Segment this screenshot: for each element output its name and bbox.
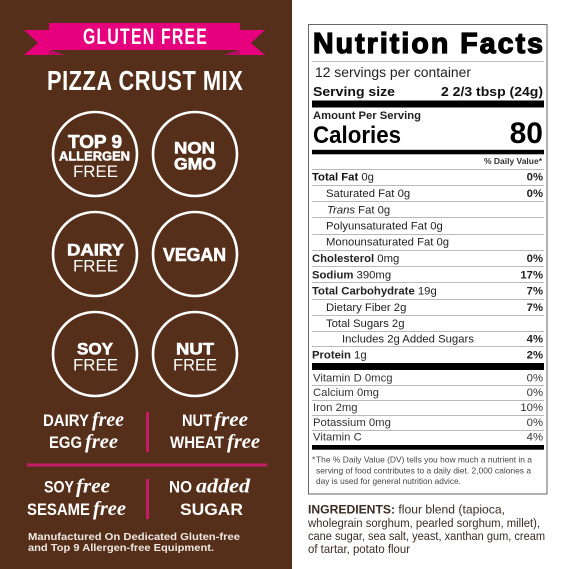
ingredients: INGREDIENTS: flour blend (tapioca, (308, 503, 505, 517)
nutrient rows: 0% (527, 188, 543, 200)
vitamins and minerals: Calcium 0mg (313, 387, 379, 399)
servings: 2 2/3 tbsp (24g) (441, 84, 543, 99)
claim: egg free: free (85, 431, 118, 453)
claim: sesame free: free (93, 498, 126, 520)
vitamins and minerals: Potassium 0mg (313, 417, 391, 429)
servings: 12 servings per container (315, 65, 472, 80)
claim: no added sugar: added (196, 476, 251, 498)
vitamins and minerals: Vitamin C (313, 432, 362, 444)
badge: vegan (153, 212, 237, 296)
vitamins and minerals: 4% (527, 432, 543, 444)
nutrient rows (312, 172, 543, 361)
footnote: day is used for general nutrition advice. (316, 477, 461, 486)
nutrient rows: Polyunsaturated Fat 0g (326, 220, 443, 232)
badge: soy free: FREE (73, 356, 118, 375)
nutrient rows: Cholesterol 0mg (312, 253, 399, 265)
nutrient rows: Total Carbohydrate 19g (312, 286, 437, 298)
ingredients: wholegrain sorghum, pearled sorghum, millet), (307, 516, 540, 530)
claim grid dividers (27, 412, 267, 519)
panel: nutrition facts (308, 24, 547, 494)
claim: wheat free: free (227, 431, 260, 453)
footnote (312, 455, 532, 486)
calories: 80 (510, 117, 543, 150)
badge: top 9 allergen free: TOP 9 (68, 132, 122, 152)
manufacturing note: Manufactured On Dedicated Gluten-free (28, 531, 240, 543)
vitamins and minerals (313, 373, 543, 444)
nutrient rows: 0% (527, 172, 543, 184)
ingredients (307, 503, 545, 556)
nutrient rows: Monounsaturated Fat 0g (326, 237, 449, 249)
footnote: * (312, 455, 316, 464)
servings (313, 65, 543, 99)
badge: non gmo: NON (174, 138, 215, 158)
calories: Amount Per Serving (313, 110, 421, 122)
claim: soy free (44, 476, 110, 498)
vitamins and minerals: 0% (527, 417, 543, 429)
nutrient rows: Total Fat 0g (312, 172, 374, 184)
footnote: The % Daily Value (DV) tells you how much a nutrient in a (316, 455, 532, 464)
badge: vegan: VEGAN (163, 245, 226, 265)
ingredients: cane sugar, sea salt, yeast, xanthan gum, cream (308, 529, 545, 543)
claim: soy free: SOY (44, 478, 75, 497)
panel: brown claims (0, 0, 292, 569)
badge: non gmo (153, 112, 237, 196)
manufacturing note: and Top 9 Allergen-free Equipment. (28, 542, 214, 554)
badge: top 9 allergen free: ALLERGEN (59, 150, 130, 164)
thick rules (312, 100, 544, 450)
badge: top 9 allergen free: FREE (73, 162, 118, 181)
claim: no added sugar (169, 476, 251, 519)
badge: nut free: FREE (173, 356, 217, 375)
calories (313, 110, 543, 150)
badge: dairy free: DAIRY (67, 241, 125, 260)
title: pizza crust mix: PIZZA CRUST MIX (47, 65, 243, 97)
claim: nut free: NUT (182, 411, 213, 430)
badge: nut free (153, 312, 237, 396)
nutrient rows: 0% (527, 253, 543, 265)
claim: dairy free (43, 409, 124, 431)
claim: no added sugar: NO (169, 478, 192, 497)
nutrient rows: Includes 2g Added Sugars (342, 333, 474, 345)
claim: nut free (182, 409, 248, 431)
nutrient rows: Trans Fat 0g (327, 204, 390, 216)
servings: Serving size (313, 84, 395, 99)
claim: no added sugar: SUGAR (180, 500, 243, 519)
vitamins and minerals: Vitamin D 0mcg (313, 373, 393, 385)
banner: gluten free (24, 23, 265, 55)
claim: soy free: free (76, 476, 110, 498)
claim: sesame free (27, 498, 126, 520)
daily value header: % Daily Value* (484, 157, 543, 166)
badge: nut free: NUT (176, 339, 215, 358)
ingredients: of tartar, potato flour (308, 542, 410, 556)
badge: non gmo: GMO (174, 154, 216, 174)
badge: soy free (53, 312, 137, 396)
claim: dairy free: DAIRY (43, 411, 90, 430)
claim: wheat free (170, 431, 260, 453)
claim: sesame free: SESAME (27, 500, 90, 519)
claim: wheat free: WHEAT (170, 433, 225, 452)
vitamins and minerals: 0% (527, 387, 543, 399)
badge: dairy free (53, 212, 137, 296)
manufacturing note (28, 531, 240, 554)
nutrient rows: 7% (527, 286, 543, 298)
nutrient rows: 2% (527, 349, 543, 361)
row lines (312, 170, 544, 430)
nutrient rows: Dietary Fiber 2g (326, 302, 406, 314)
badge: top 9 allergen free (53, 112, 137, 196)
badge: dairy free: FREE (73, 257, 118, 276)
banner: gluten free: GLUTEN FREE (83, 26, 207, 50)
claim: dairy free: free (92, 409, 124, 431)
claim: egg free: EGG (49, 433, 82, 452)
nutrient rows: 7% (527, 302, 543, 314)
footnote: serving of food contributes to a daily diet. 2,000 calories a (316, 466, 531, 475)
nutrient rows: Total Sugars 2g (326, 318, 404, 330)
vitamins and minerals: 10% (520, 402, 543, 414)
nutrient rows: Saturated Fat 0g (326, 188, 410, 200)
vitamins and minerals: Iron 2mg (313, 402, 358, 414)
claim: egg free (49, 431, 118, 453)
nutrient rows: 4% (527, 333, 543, 345)
nutrition heading: Nutrition Facts (313, 28, 543, 60)
calories: Calories (313, 122, 401, 149)
claim: nut free: free (214, 409, 248, 431)
nutrient rows: Sodium 390mg (312, 269, 391, 281)
nutrient rows: 17% (520, 269, 543, 281)
vitamins and minerals: 0% (527, 373, 543, 385)
nutrient rows: Protein 1g (312, 349, 367, 361)
badge: soy free: SOY (77, 339, 114, 358)
